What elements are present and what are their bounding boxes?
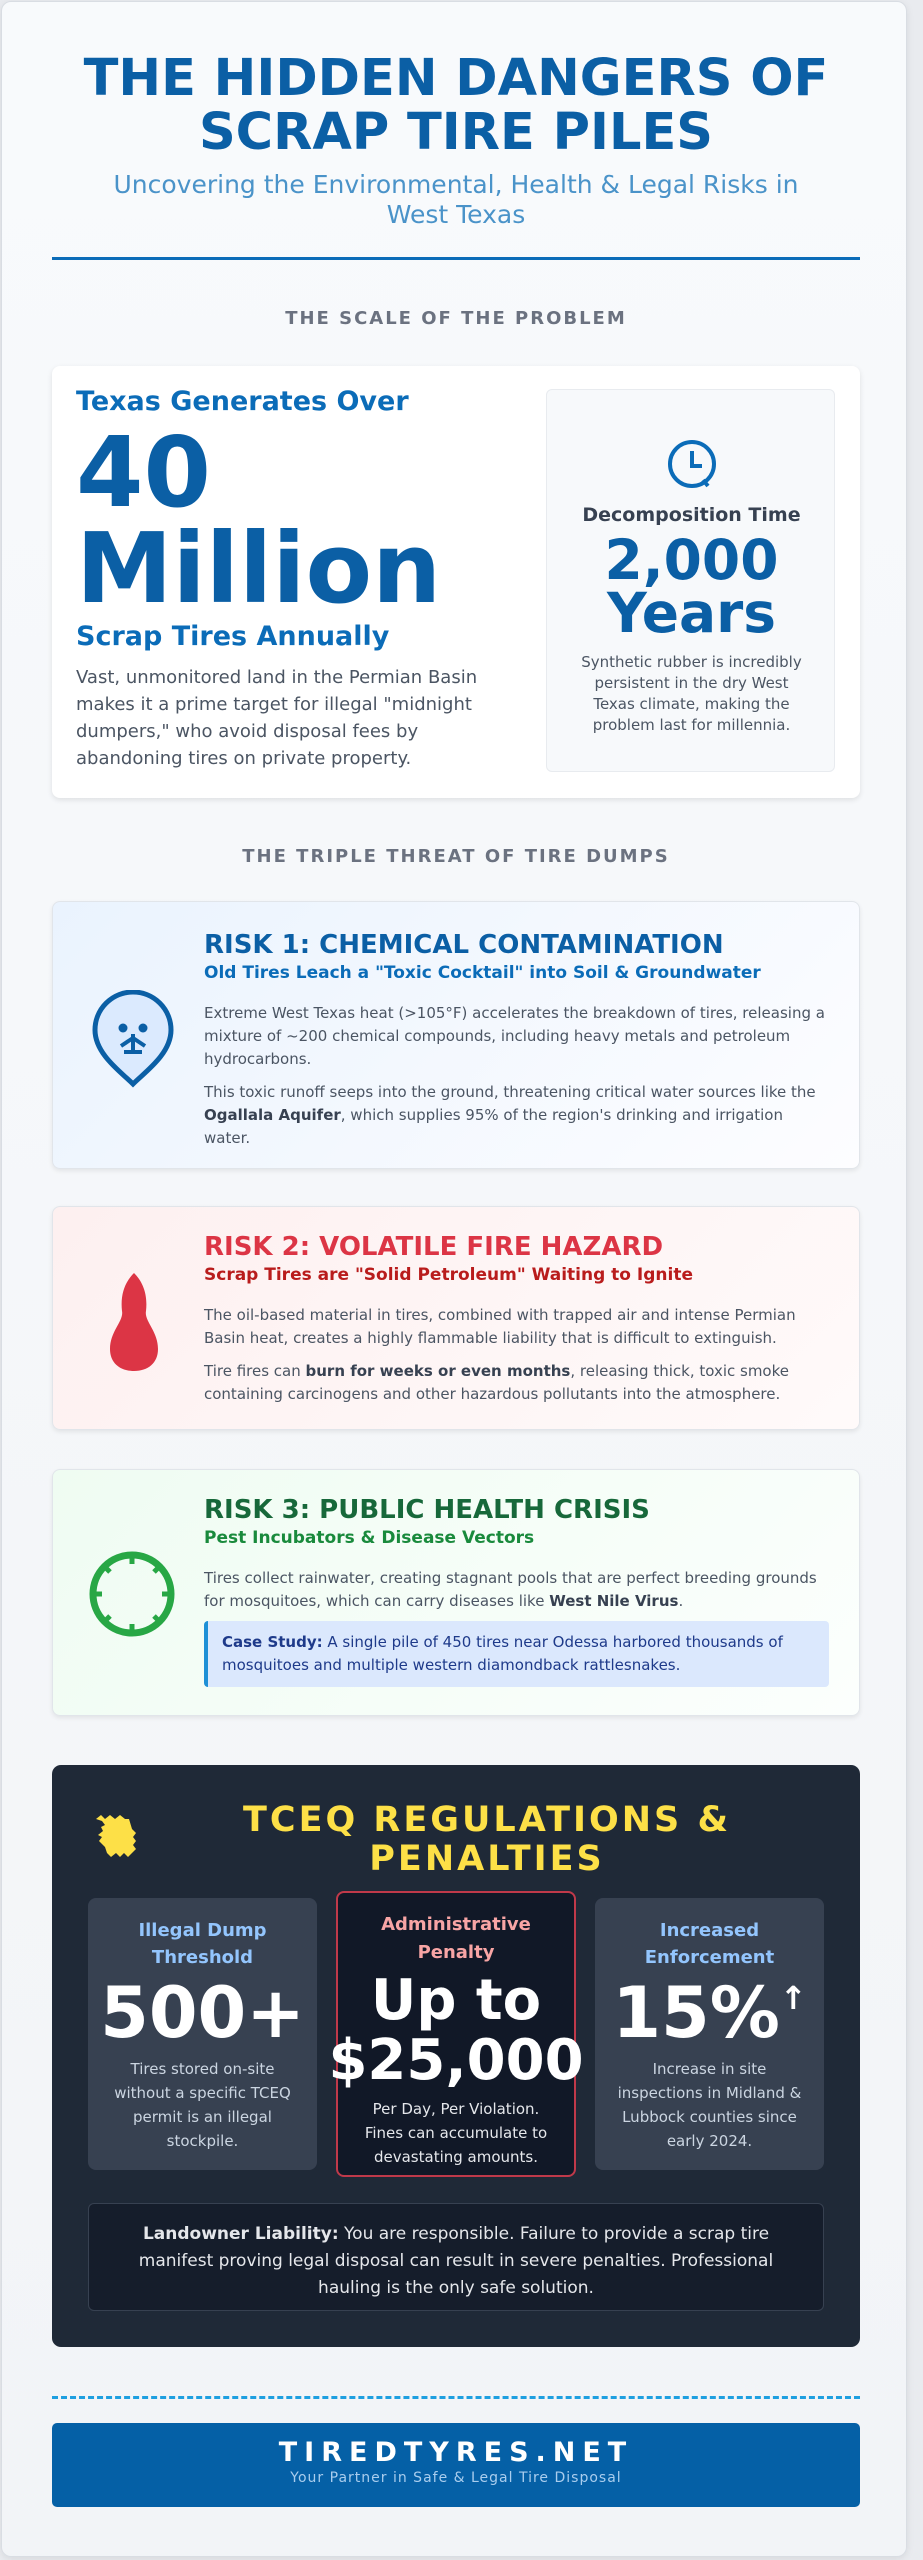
panel: risk 1 [52,901,860,1169]
stat: administrative penalty: Up to [371,1968,541,2033]
section heading: scale: THE SCALE OF THE PROBLEM [285,308,627,329]
icon: clock [668,440,716,488]
panel: risk 3 [52,1469,860,1716]
section heading: triple threat: THE TRIPLE THREAT OF TIRE DUMPS [242,846,670,867]
subtitle [113,170,799,229]
stat: 40 million: Million [76,512,441,625]
panel: decomposition: Decomposition Time [582,504,801,526]
callout: case study [204,1621,829,1687]
stat: 40 million [76,386,477,769]
stat: dump threshold: Threshold [152,1947,253,1968]
stat: administrative penalty: devastating amounts. [374,2148,538,2166]
stat: enforcement: Increased [660,1920,759,1941]
callout: landowner liability: Landowner Liability: You are responsible. Failure to provide a scrap tire manifest proving legal disposal can result in severe penalties. Professional hauling is the only safe solution. [139,2224,773,2298]
footer: Your Partner in Safe & Legal Tire Disposal [290,2470,622,2486]
stat: dump threshold: Tires stored on-site without a specific TCEQ permit is an illegal stockpile. [114,2060,291,2150]
stat: enforcement: 15%↑ [612,1972,807,2054]
stat: administrative penalty: Fines can accumulate to [365,2124,547,2142]
panel: decomposition: 2,000 [604,528,778,592]
stat: administrative penalty: $25,000 [328,2028,584,2093]
panel: risk 1: RISK 1: CHEMICAL CONTAMINATION [204,930,724,960]
callout: landowner liability [88,2203,824,2311]
panel: risk 2: RISK 2: VOLATILE FIRE HAZARD [204,1232,663,1262]
title: THE HIDDEN DANGERS OF [84,49,828,108]
heading: TCEQ REGULATIONS & [243,1800,731,1840]
icon: virus circle [90,1552,174,1636]
panel: risk 1: Extreme West Texas heat (>105°F) accelerates the breakdown of tires, releasing a mixture of ~200 chemical compounds, including heavy metals and petroleum hydrocarbons. [204,1004,825,1068]
panel: TCEQ regulations [52,1765,860,2347]
panel: risk 2: Tire fires can burn for weeks or even months, releasing thick, toxic smoke containing carcinogens and other hazardous pollutants into the atmosphere. [204,1362,789,1403]
stat: 40 million: Scrap Tires Annually [76,621,389,652]
stat: enforcement [595,1898,824,2170]
icon: flame [110,1273,158,1371]
stat: dump threshold: 500+ [100,1972,305,2054]
stat: administrative penalty: Penalty [418,1942,494,1963]
stat: 40 million: Vast, unmonitored land in the Permian Basin makes it a prime target for illegal "midnight dumpers," who avoid disposal fees by abandoning tires on private property. [76,667,477,769]
title [84,49,828,162]
stat: 40 million: Texas Generates Over [76,386,409,417]
panel: decomposition: Synthetic rubber is incredibly persistent in the dry West Texas climate, making the problem last for millennia. [581,653,802,734]
panel: risk 2 [52,1206,860,1430]
stat: dump threshold: Illegal Dump [138,1920,267,1941]
icon: toxic drop [92,990,174,1088]
panel: risk 2: The oil-based material in tires, combined with trapped air and intense Permian Basin heat, creates a highly flammable liability that is difficult to extinguish. [204,1306,796,1347]
footer: TIREDTYRES.NET [279,2437,633,2468]
stat: dump threshold [88,1898,317,2170]
callout: case study: Case Study: A single pile of 450 tires near Odessa harbored thousands of mosquitoes and multiple western diamondback rattlesnakes. [222,1633,783,1674]
panel: risk 3: Pest Incubators & Disease Vectors [204,1528,534,1548]
heading [243,1800,731,1879]
panel: risk 1: Old Tires Leach a "Toxic Cocktail" into Soil & Groundwater [204,963,761,983]
panel: risk 3: RISK 3: PUBLIC HEALTH CRISIS [204,1495,650,1525]
panel: decomposition [546,389,835,772]
title: SCRAP TIRE PILES [199,103,713,162]
icon: texas [96,1815,136,1857]
stat: 40 million: 40 [76,416,211,529]
subtitle: Uncovering the Environmental, Health & Legal Risks in [113,170,799,199]
stat: administrative penalty [336,1891,576,2177]
panel: risk 3: Tires collect rainwater, creating stagnant pools that are perfect breeding grounds for mosquitoes, which can carry diseases like West Nile Virus. [204,1569,817,1610]
panel: risk 1: This toxic runoff seeps into the ground, threatening critical water sources like the Ogallala Aquifer, which supplies 95% of the region's drinking and irrigation water. [204,1083,816,1147]
stat: enforcement: Increase in site inspections in Midland & Lubbock counties since early 2024. [618,2060,801,2150]
panel: scale stats [52,366,860,798]
subtitle: West Texas [387,200,525,229]
stat: administrative penalty: Per Day, Per Violation. [373,2100,539,2118]
panel: risk 2: Scrap Tires are "Solid Petroleum" Waiting to Ignite [204,1265,693,1285]
panel: decomposition: Years [607,581,776,645]
stat: enforcement: Enforcement [645,1947,774,1968]
footer [52,2423,860,2507]
stat: administrative penalty: Administrative [381,1914,531,1935]
heading: PENALTIES [369,1839,605,1879]
